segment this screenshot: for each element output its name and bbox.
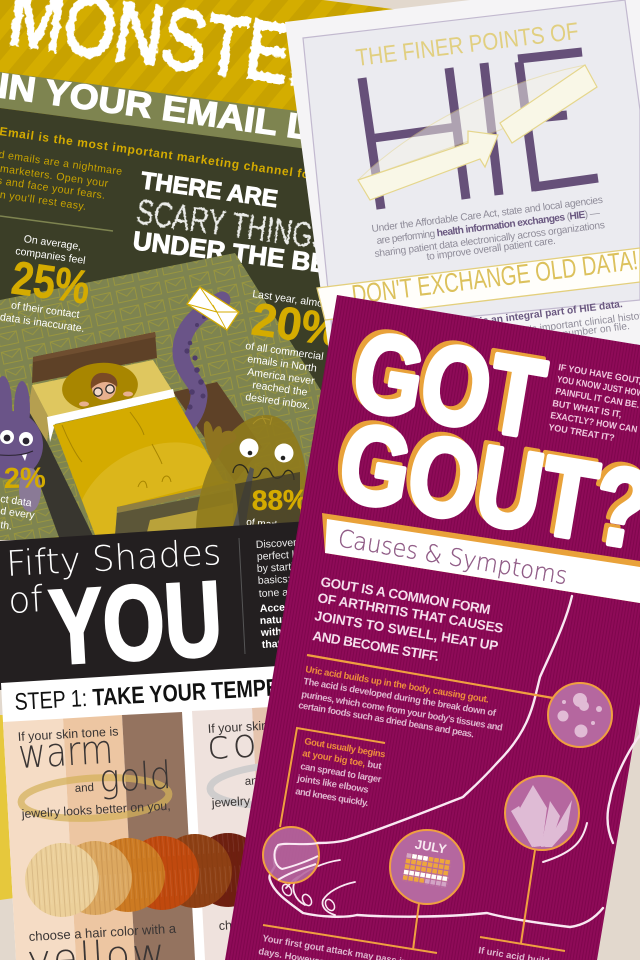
stat: 25 percent [0,250,93,335]
intro text: by starting [256,560,306,575]
intro questions: YOU TREAT IT? [548,422,616,443]
stat: 25 percent: of their contact [10,300,80,321]
panel: fifty shades of you [0,521,361,960]
heading: step 1: STEP 1: TAKE YOUR TEMPERATURE [14,670,360,716]
warm skin columns [3,712,195,960]
stat: 20 percent: Last year, almost [252,288,332,311]
panel: finer points of hie [285,0,640,360]
headline: there are scary things under the bed: UNDER THE BED [131,225,348,281]
icon: july calendar: JULY [414,837,448,857]
stat: 20 percent: reached the [252,379,308,399]
callout: uric acid: Uric acid builds up in the body, causing gout. [305,663,490,705]
callout: uric acid: certain foods such as dried beans and peas. [298,699,475,739]
dark background [0,108,330,540]
hair colour swatches [25,833,265,917]
panel: got gout [225,295,640,960]
leg and foot outline [269,596,640,927]
title: got: GOT [341,304,549,458]
stat: 20 percent: 20% [249,292,345,356]
intro text: that's right [261,636,316,651]
intro text: with a color [259,624,319,639]
black header [0,521,310,690]
bedroom wallpaper [0,253,330,540]
lead paragraph [312,574,504,664]
paper [285,0,640,360]
text: hair colour: choose a hair color with a [28,921,177,944]
subtitle band [322,513,640,603]
title: fifty shades: Fifty Shades [5,533,222,585]
stat: 88 percent: 88% [252,484,308,516]
bed [20,332,241,540]
icon: uric acid circle [548,683,612,747]
stat: 20 percent: of all commercial [245,340,324,363]
panel: monsters in your email list [0,0,400,900]
intro text: perfect look [256,548,312,563]
stat: 25 percent: data is inaccurate. [0,311,85,335]
headline: there are scary things under the bed [131,167,348,281]
banner [317,248,640,320]
stat: 25 percent intro: On average, [23,233,82,253]
olive heading band [0,72,320,151]
callout: uric acid: purines, which come from your body's tissues and [301,688,504,733]
intro paragraph: to improve overall patient care. [426,236,556,263]
subheading: Email is the most important marketing channel for [0,124,316,182]
callout: uric acid [298,655,612,747]
intro text: Discover your [255,535,321,551]
text: cool: and silver [244,773,294,788]
text: cool: jewelry looks better on you, [210,788,361,810]
connector lines to lower callouts [263,850,565,953]
bed frame back [173,382,262,482]
arrow ribbon [358,65,597,200]
intro questions: BUT WHAT IS IT, [552,398,622,420]
callout: big toe: can spread to larger [300,760,383,785]
stat: 25 percent intro [15,233,86,267]
stat: 20 percent: emails in North [247,353,318,375]
intro questions [548,362,640,443]
lead paragraph: OF ARTHRITIS THAT CAUSES [317,590,504,636]
tentacle [181,300,222,424]
laptop [232,467,254,530]
intro text [0,147,123,213]
body text under banner: number on file. [562,321,630,340]
text: cool: cool [206,718,302,769]
maroon background [225,295,640,960]
text: warm [17,724,172,822]
headline: there are scary things under the bed: THERE ARE [139,167,279,213]
intro text: basics: skin [257,572,313,587]
white body [1,664,310,960]
inner frame [303,0,640,330]
intro paragraph: are performing health information exchanges (HIE) — [376,208,601,247]
monster: purple bunny [0,376,43,512]
intro text: Accent your [259,600,321,615]
stat: 88 percent: of marketers [246,517,302,534]
title: you: YOU [47,560,225,687]
shadow band at foot of bed [235,472,300,530]
sleeper peeking over blanket [79,373,133,406]
stat: 2 percent: 2% [4,462,46,495]
title: of: of [7,579,44,622]
sliver of white page at right edge [636,700,640,740]
yellow strip at lower left [0,715,14,900]
body text under banner: Medication is an integral part of HIE data. [424,299,624,334]
intro paragraph [371,195,606,263]
stat: 25 percent: 25% [9,250,93,314]
monster: yellow blob [196,415,306,530]
callout: big toe: at your big toe, but [302,747,382,771]
stat: 20 percent: America never [247,366,316,387]
icon: july calendar [390,830,464,904]
text: warm: gold [98,753,172,801]
intro text: tone and [258,586,300,600]
icon: toe circle [263,827,319,883]
intro paragraph: Under the Affordable Care Act, state and local agencies [371,195,604,235]
lower callout text [258,932,556,960]
text: cool: If your skin tone is [207,716,309,736]
intro paragraph: sharing patient data electronically across organizations [374,220,606,260]
icon: crystals [505,776,579,850]
headline: there are scary things under the bed: SCARY THINGS [134,192,332,258]
stat: 2 percent [0,462,46,533]
stat: 88 percent [246,484,308,534]
subtitle band: Causes & Symptoms [336,524,569,590]
text: warm: warm [17,727,114,778]
stat: 2 percent: ct data [0,493,33,509]
callout: big toe [263,728,386,883]
title: THE FINER POINTS OF [354,18,580,72]
intro text: natural beauty [259,611,332,627]
intro text [255,535,332,651]
stat: 20 percent: desired inbox. [245,391,311,412]
heading: in your email list: IN YOUR EMAIL LIST [0,66,370,155]
lead paragraph: AND BECOME STIFF. [312,628,440,664]
cool skin columns [192,705,323,960]
text: cool [206,716,361,933]
icon: envelope [187,287,239,330]
text: warm: jewelry looks better on you, [20,799,171,821]
stat: 20 percent [245,288,345,412]
text: warm: If your skin tone is [17,724,119,744]
flashlight beam [82,442,223,540]
stat: 2 percent: d every [0,505,36,522]
text: warm: and [74,782,94,795]
striped yellow header [0,0,400,180]
lead paragraph: JOINTS TO SWELL, HEAT UP [314,608,499,654]
lead paragraph: GOUT IS A COMMON FORM [320,574,492,617]
stat: 25 percent intro: companies feel [15,245,86,267]
large hie letters [362,52,598,209]
callout: uric acid: The acid is developed during the break down of [303,675,498,718]
callout: big toe: joints like elbows [296,772,369,795]
title: got: GOT [345,308,553,462]
callout: big toe: and knees quickly. [295,785,369,808]
callout: big toe: Gout usually begins [304,735,386,760]
text: cool: choose a hair color [218,913,325,933]
